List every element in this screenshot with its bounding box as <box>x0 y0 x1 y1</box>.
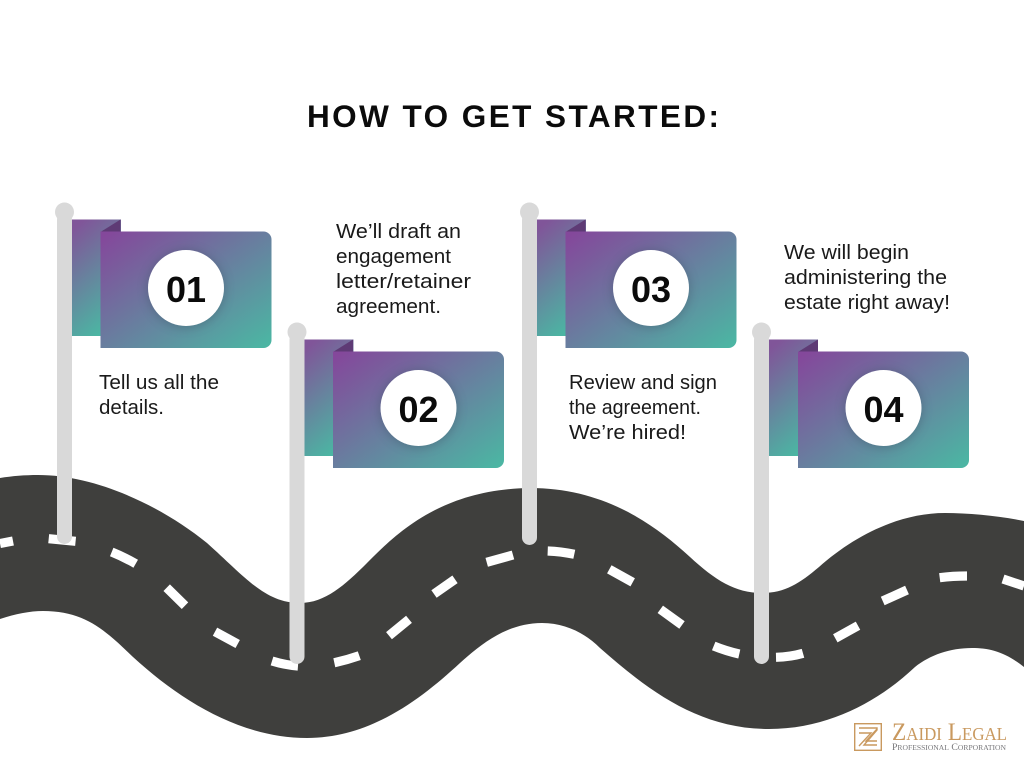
logo: Zaidi Legal <box>855 719 1007 752</box>
step 01 text: Tell us all the <box>99 372 219 394</box>
step 01 text: details. <box>99 397 164 419</box>
step 02 text <box>336 221 471 318</box>
step 01 flag <box>55 202 272 544</box>
number 01: 01 <box>166 269 206 310</box>
step 03 text <box>569 372 717 444</box>
step 03 text: Review and sign <box>569 372 717 394</box>
number 04: 04 <box>863 389 904 430</box>
logo: Zaidi Legal: ZAIDI LEGAL <box>892 719 1007 746</box>
winding road <box>0 475 1024 738</box>
step 02 text: We’ll draft an <box>336 221 461 243</box>
step 02 text: engagement <box>336 246 451 268</box>
step 04 text <box>784 242 950 314</box>
icon: Z monogram <box>855 724 881 750</box>
step 03 text: the agreement. <box>569 397 701 419</box>
step 04 flag <box>752 322 969 664</box>
number 03: 03 <box>631 269 671 310</box>
step 04 text: We will begin <box>784 242 909 264</box>
road centre dashes <box>0 539 1024 666</box>
step 03 flag <box>520 202 736 545</box>
flag pole 01 <box>55 202 74 544</box>
step 03 text: We’re hired! <box>569 422 686 444</box>
flag pole 04 <box>752 322 771 664</box>
step 02 flag <box>288 322 504 664</box>
step 01 text <box>99 372 219 419</box>
title: HOW TO GET STARTED: <box>307 98 719 134</box>
logo: Zaidi Legal: PROFESSIONAL CORPORATION <box>892 742 1006 752</box>
number 02: 02 <box>398 389 439 430</box>
flag pole 03 <box>520 202 539 545</box>
step 04 text: administering the <box>784 267 947 289</box>
step 04 text: estate right away! <box>784 292 950 314</box>
flag pole 02 <box>288 322 306 664</box>
step 02 text: letter/retainer <box>336 271 471 293</box>
step 02 text: agreement. <box>336 296 441 318</box>
